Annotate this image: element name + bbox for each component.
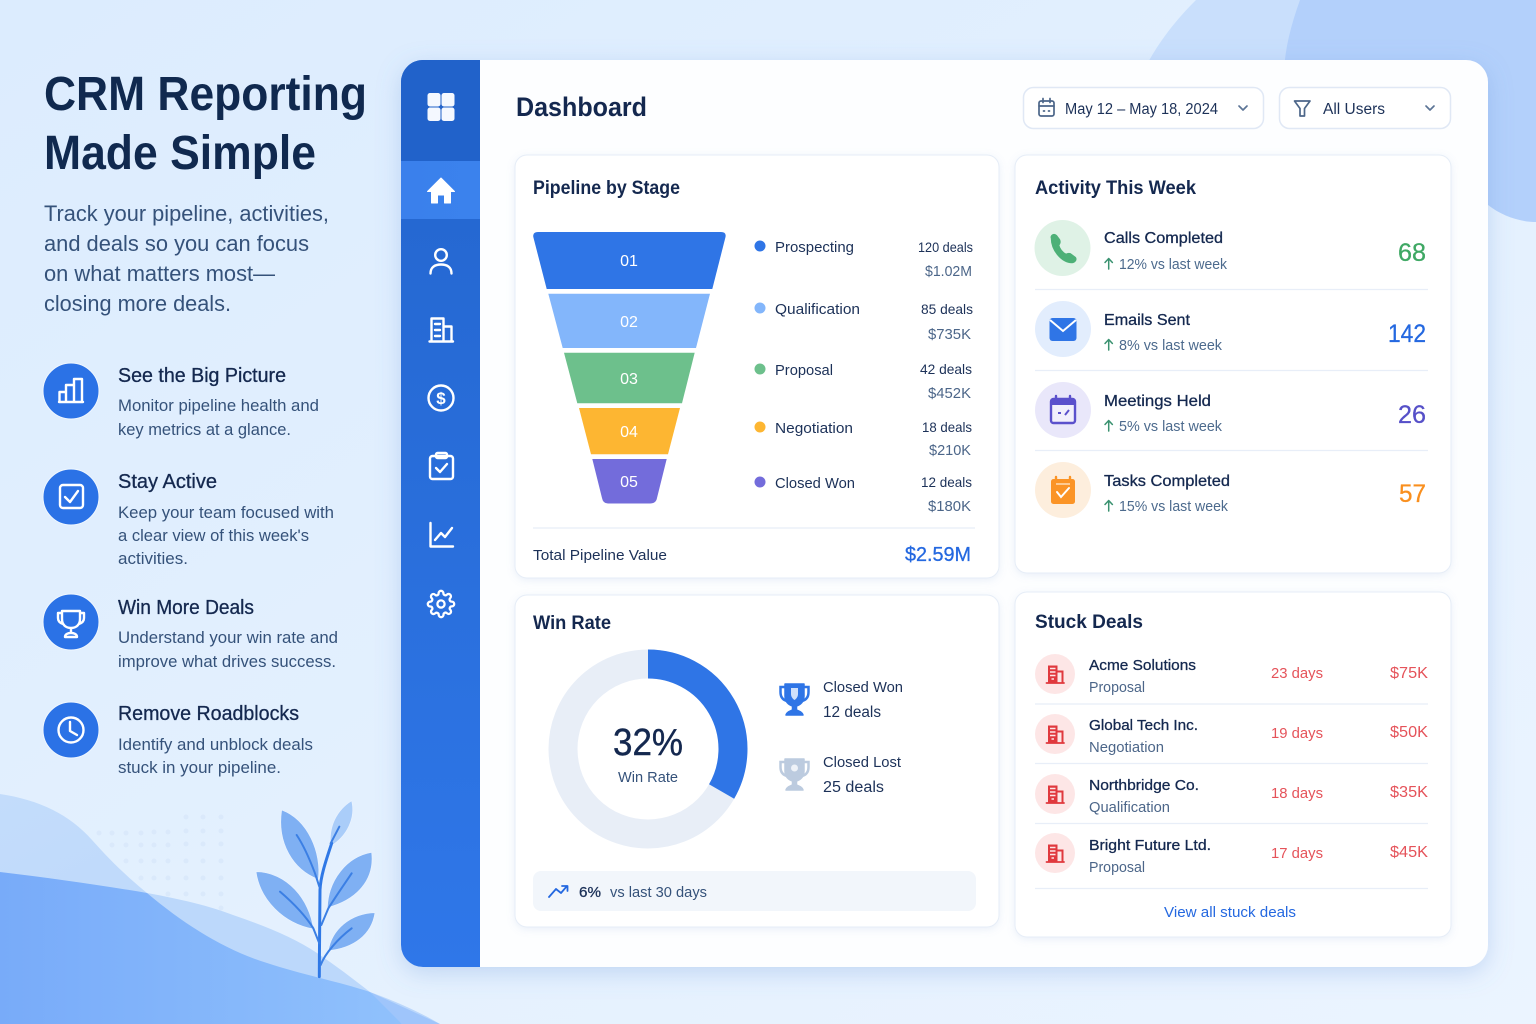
- row: Bright Future Ltd.: $45K: [1390, 844, 1428, 861]
- trend note: [533, 871, 976, 911]
- intro text: and deals so you can focus: [44, 231, 309, 256]
- title: Made Simple: [44, 127, 316, 180]
- row: Global Tech Inc.: Negotiation: [1089, 740, 1164, 756]
- feature: Win More Deals: Understand your win rate and: [118, 628, 338, 647]
- row: calls completed: 12% vs last week: [1119, 257, 1228, 273]
- hills bottom left: [0, 794, 440, 1024]
- dotted pattern: [99, 817, 221, 908]
- icon: trend arrow: [549, 886, 568, 897]
- legend: closed won: [780, 679, 903, 721]
- icon: checkbox: [43, 469, 99, 525]
- decorative blobs top right: [1146, 0, 1536, 222]
- feature: Remove Roadblocks: [43, 702, 313, 777]
- user filter: All Users: [1323, 101, 1385, 118]
- panel: activity this week: [1015, 155, 1451, 573]
- row: Global Tech Inc.: 19 days: [1271, 725, 1323, 742]
- donut chart: Win Rate: [618, 769, 678, 786]
- title: CRM Reporting: [44, 68, 367, 121]
- row: tasks completed: Tasks Completed: [1104, 473, 1230, 490]
- link: view all stuck deals: View all stuck deals: [1164, 904, 1296, 921]
- row: emails sent: [1035, 301, 1426, 357]
- feature: Stay Active: activities.: [118, 549, 188, 568]
- icon: chevron: [1426, 106, 1434, 110]
- icon: gear: [428, 591, 454, 617]
- feature: See the Big Picture: key metrics at a glance.: [118, 420, 291, 439]
- row: Bright Future Ltd.: Proposal: [1089, 860, 1145, 876]
- icon: grey trophy: [780, 759, 808, 790]
- funnel chart: [533, 232, 726, 504]
- icon: envelope: [1035, 301, 1091, 357]
- icon: clock: [43, 702, 99, 758]
- feature: Stay Active: a clear view of this week's: [118, 526, 309, 545]
- icon: person: [430, 249, 452, 274]
- icon: building: [430, 318, 453, 342]
- donut chart: 32%: [613, 722, 683, 764]
- feature: See the Big Picture: See the Big Picture: [118, 365, 286, 387]
- row: meetings held: [1035, 382, 1426, 438]
- intro text: Track your pipeline, activities,: [44, 201, 329, 226]
- trend note: vs last 30 days: [610, 885, 707, 901]
- feature: See the Big Picture: [43, 363, 319, 439]
- row: emails sent: Emails Sent: [1104, 312, 1191, 329]
- icon: trophy: [43, 594, 99, 650]
- row: Northbridge Co.: [1035, 774, 1428, 816]
- legend: closed lost: [780, 754, 902, 796]
- icon: building: [1035, 654, 1075, 694]
- icon: calendar: [1039, 98, 1054, 116]
- legend: stages: 85 deals: [921, 301, 973, 317]
- active nav row: [401, 161, 480, 219]
- legend: stages: Qualification: [775, 301, 860, 318]
- legend: stages: 18 deals: [922, 419, 972, 435]
- legend: closed lost: 25 deals: [823, 779, 884, 796]
- legend: stages: $210K: [929, 442, 971, 459]
- funnel chart: 01: [620, 253, 638, 270]
- intro text: on what matters most—: [44, 261, 275, 286]
- legend: stages: $452K: [928, 385, 971, 402]
- feature: Remove Roadblocks: stuck in your pipeline.: [118, 758, 281, 777]
- row: Bright Future Ltd.: Bright Future Ltd.: [1089, 837, 1211, 854]
- row: Bright Future Ltd.: 17 days: [1271, 845, 1323, 862]
- heading: Dashboard: Dashboard: [516, 92, 647, 122]
- legend: stages: $180K: [928, 498, 971, 515]
- row: Acme Solutions: Proposal: [1089, 680, 1145, 696]
- title: [44, 68, 367, 180]
- feature: Remove Roadblocks: Remove Roadblocks: [118, 703, 299, 725]
- row: Northbridge Co.: 18 days: [1271, 785, 1323, 802]
- icon: blue trophy: [780, 684, 808, 715]
- icon: plant: [256, 801, 375, 977]
- funnel chart: 05: [620, 474, 638, 491]
- row: tasks completed: [1035, 462, 1426, 518]
- row: calls completed: [1034, 220, 1426, 276]
- row: meetings held: Meetings Held: [1104, 393, 1211, 410]
- row: Global Tech Inc.: $50K: [1390, 724, 1428, 741]
- row: Global Tech Inc.: [1035, 714, 1428, 756]
- intro text: closing more deals.: [44, 291, 231, 316]
- icon: chart line: [430, 523, 453, 546]
- icon: chevron: [1239, 106, 1247, 110]
- total pipeline value: Total Pipeline Value: [533, 547, 667, 564]
- legend: stages: [754, 239, 973, 515]
- row: Acme Solutions: [1035, 654, 1428, 696]
- panel: win rate: [515, 595, 999, 927]
- row: Acme Solutions: 23 days: [1271, 665, 1323, 682]
- trend note: 6%: [579, 884, 601, 901]
- icon: bar chart: [43, 363, 99, 419]
- feature: Stay Active: Keep your team focused with: [118, 503, 334, 522]
- legend: stages: 12 deals: [921, 474, 972, 490]
- icon: phone: [1034, 220, 1090, 276]
- heading: Activity This Week: [1035, 177, 1196, 199]
- legend: closed won: 12 deals: [823, 704, 881, 721]
- funnel chart: 04: [620, 424, 638, 441]
- feature: Win More Deals: improve what drives success.: [118, 652, 336, 671]
- feature: Win More Deals: [43, 594, 338, 671]
- legend: stages: 120 deals: [918, 239, 973, 255]
- date range selector: May 12 – May 18, 2024: [1065, 101, 1218, 118]
- row: Acme Solutions: Acme Solutions: [1089, 657, 1196, 674]
- heading: Win Rate: [533, 612, 611, 634]
- legend: stages: 42 deals: [920, 361, 972, 377]
- panel: sidebar: [401, 60, 480, 967]
- panel: dashboard window: [401, 60, 1488, 967]
- row: meetings held: 26: [1398, 401, 1426, 429]
- funnel chart: 02: [620, 314, 638, 331]
- icon: clipboard: [430, 453, 453, 479]
- legend: stages: Closed Won: [775, 475, 855, 492]
- icon: dollar: $: [436, 389, 446, 408]
- row: Northbridge Co.: Northbridge Co.: [1089, 777, 1199, 794]
- row: tasks completed: 15% vs last week: [1119, 499, 1229, 515]
- row: Acme Solutions: $75K: [1390, 665, 1428, 682]
- heading: Stuck Deals: [1035, 611, 1143, 633]
- row: calls completed: Calls Completed: [1104, 230, 1223, 247]
- feature: See the Big Picture: Monitor pipeline health and: [118, 396, 319, 415]
- total pipeline value: [533, 544, 971, 566]
- feature: Win More Deals: Win More Deals: [118, 597, 254, 619]
- icon: building: [1035, 714, 1075, 754]
- row: emails sent: 8% vs last week: [1119, 338, 1223, 354]
- legend: stages: $1.02M: [925, 263, 972, 280]
- icon: task calendar: [1035, 462, 1091, 518]
- feature: Stay Active: [43, 469, 334, 568]
- panel: stuck deals: [1015, 592, 1451, 937]
- row: calls completed: 68: [1398, 239, 1426, 267]
- donut chart: [563, 664, 733, 834]
- legend: stages: Prospecting: [775, 239, 854, 256]
- legend: stages: Proposal: [775, 362, 833, 379]
- row: tasks completed: 57: [1399, 480, 1426, 508]
- legend: stages: Negotiation: [775, 420, 853, 437]
- icon: building: [1035, 774, 1075, 814]
- row: Northbridge Co.: $35K: [1390, 784, 1428, 801]
- row: emails sent: 142: [1388, 320, 1426, 348]
- legend: closed won: Closed Won: [823, 679, 903, 696]
- feature: Stay Active: Stay Active: [118, 471, 217, 493]
- row: Northbridge Co.: Qualification: [1089, 800, 1170, 816]
- funnel chart: 03: [620, 371, 638, 388]
- row: meetings held: 5% vs last week: [1119, 419, 1223, 435]
- icon: building: [1035, 833, 1075, 873]
- feature: Remove Roadblocks: Identify and unblock deals: [118, 735, 313, 754]
- heading: Pipeline by Stage: [533, 177, 680, 199]
- user filter: [1280, 88, 1450, 128]
- legend: stages: $735K: [928, 326, 971, 343]
- intro text: [44, 201, 329, 316]
- row: Bright Future Ltd.: [1035, 833, 1428, 876]
- icon: funnel: [1294, 101, 1310, 116]
- panel: pipeline by stage: [515, 155, 999, 578]
- icon: dollar: [428, 386, 454, 410]
- icon: logo grid: [428, 93, 454, 121]
- row: Global Tech Inc.: Global Tech Inc.: [1089, 717, 1198, 734]
- date range selector: [1024, 88, 1264, 128]
- icon: home: [428, 178, 454, 203]
- legend: closed lost: Closed Lost: [823, 754, 902, 771]
- total pipeline value: $2.59M: [905, 544, 971, 566]
- icon: calendar: [1035, 382, 1091, 438]
